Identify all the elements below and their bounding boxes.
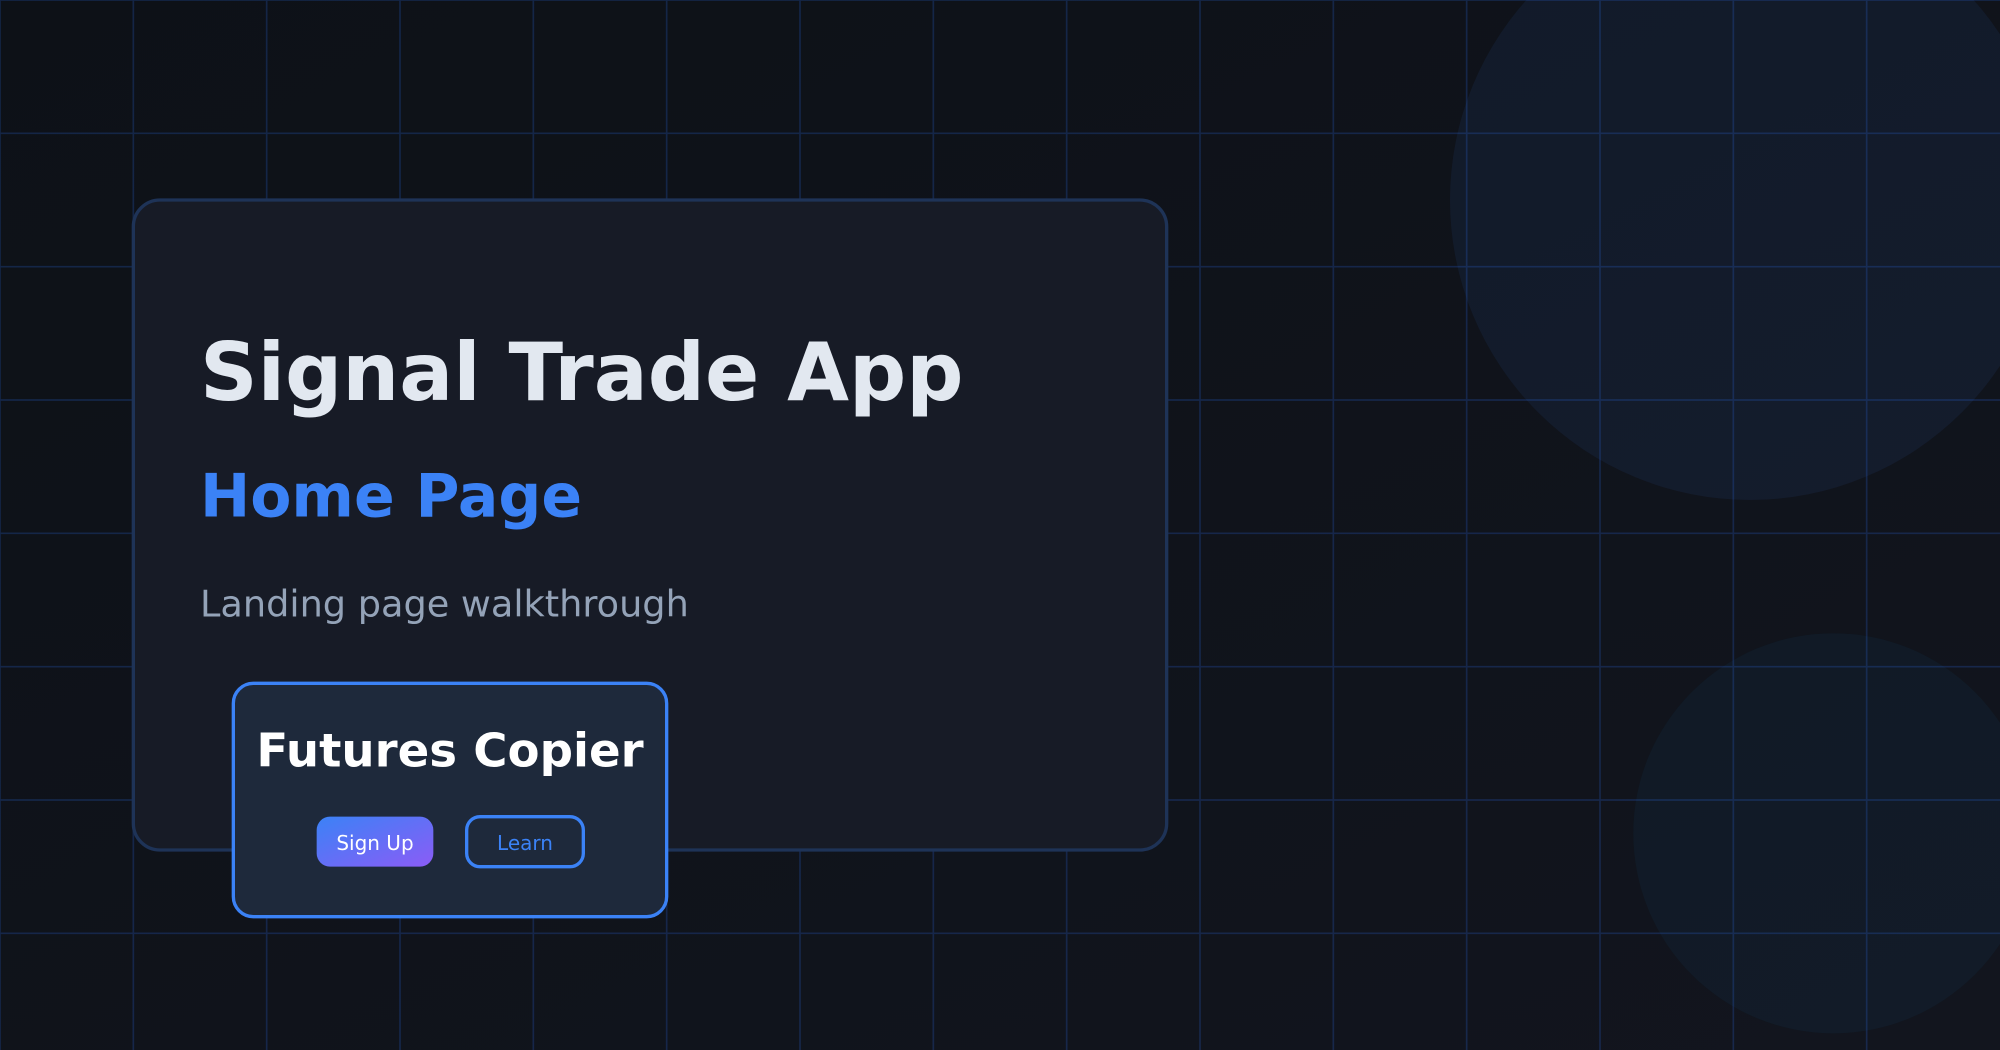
button: learn: [467, 817, 583, 867]
panel: futures copier card: [233, 683, 667, 917]
button: learn: Learn: [497, 831, 553, 855]
decorative circle: top right: [1450, 0, 2000, 500]
title: Signal Trade App: [200, 326, 964, 419]
button: sign up: [317, 817, 433, 867]
panel: main card: [133, 200, 1167, 850]
subtitle: Home Page: [200, 462, 582, 532]
copier card background: [233, 683, 667, 917]
copier heading: Futures Copier: [256, 725, 644, 779]
card background: [133, 200, 1167, 850]
description: Landing page walkthrough: [200, 583, 689, 626]
decorative circle: bottom right: [1633, 633, 2000, 1033]
button: sign up: Sign Up: [336, 831, 414, 855]
